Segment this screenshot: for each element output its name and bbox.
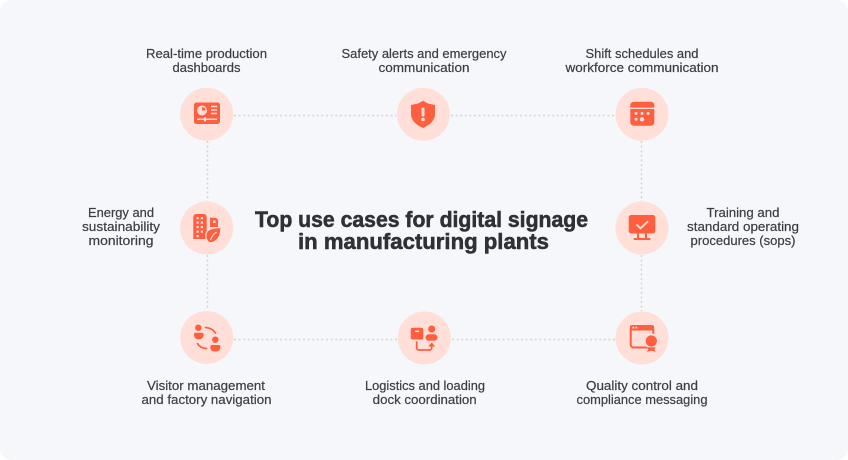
label: energy and sustainability: Energy and (88, 205, 154, 220)
label: safety alerts: Safety alerts and emergency (342, 46, 507, 61)
label: shift schedules: Shift schedules and (586, 46, 698, 61)
icon: monitor check (616, 202, 668, 254)
icon: certified window (616, 312, 668, 364)
icon: calendar (616, 88, 668, 141)
label: quality control: compliance messaging (576, 392, 708, 407)
label: quality control (576, 378, 708, 407)
label: energy and sustainability (82, 205, 161, 248)
label: training and sops: Training and (706, 205, 780, 220)
label: real-time production dashboards: dashboards (172, 60, 241, 75)
connector lines (208, 116, 642, 340)
label: safety alerts: communication (378, 60, 470, 75)
label: training and sops: procedures (sops) (690, 233, 796, 248)
label: logistics (365, 378, 485, 407)
label: shift schedules: workforce communication (564, 60, 718, 75)
label: energy and sustainability: sustainability (82, 219, 161, 234)
title: Top use cases for digital signage (255, 207, 588, 232)
label: training and sops (687, 205, 799, 248)
label: quality control: Quality control and (586, 378, 698, 393)
label: logistics: Logistics and loading (365, 378, 485, 393)
icon: logistics (398, 312, 451, 364)
title (255, 207, 588, 254)
icon: visitor navigation (180, 311, 233, 364)
title: in manufacturing plants (298, 229, 549, 254)
icon: shield alert (397, 88, 450, 141)
label: visitor management: Visitor management (147, 378, 265, 393)
label: energy and sustainability: monitoring (88, 233, 154, 248)
label: visitor management: and factory navigation (142, 392, 272, 407)
label: shift schedules (564, 46, 718, 75)
icon: green building (180, 202, 233, 254)
label: safety alerts (342, 46, 507, 75)
label: logistics: dock coordination (373, 392, 477, 407)
label: real-time production dashboards (146, 46, 267, 75)
icon: dashboard (180, 88, 233, 141)
label: real-time production dashboards: Real-time production (146, 46, 267, 61)
label: visitor management (142, 378, 272, 407)
label: training and sops: standard operating (687, 219, 799, 234)
